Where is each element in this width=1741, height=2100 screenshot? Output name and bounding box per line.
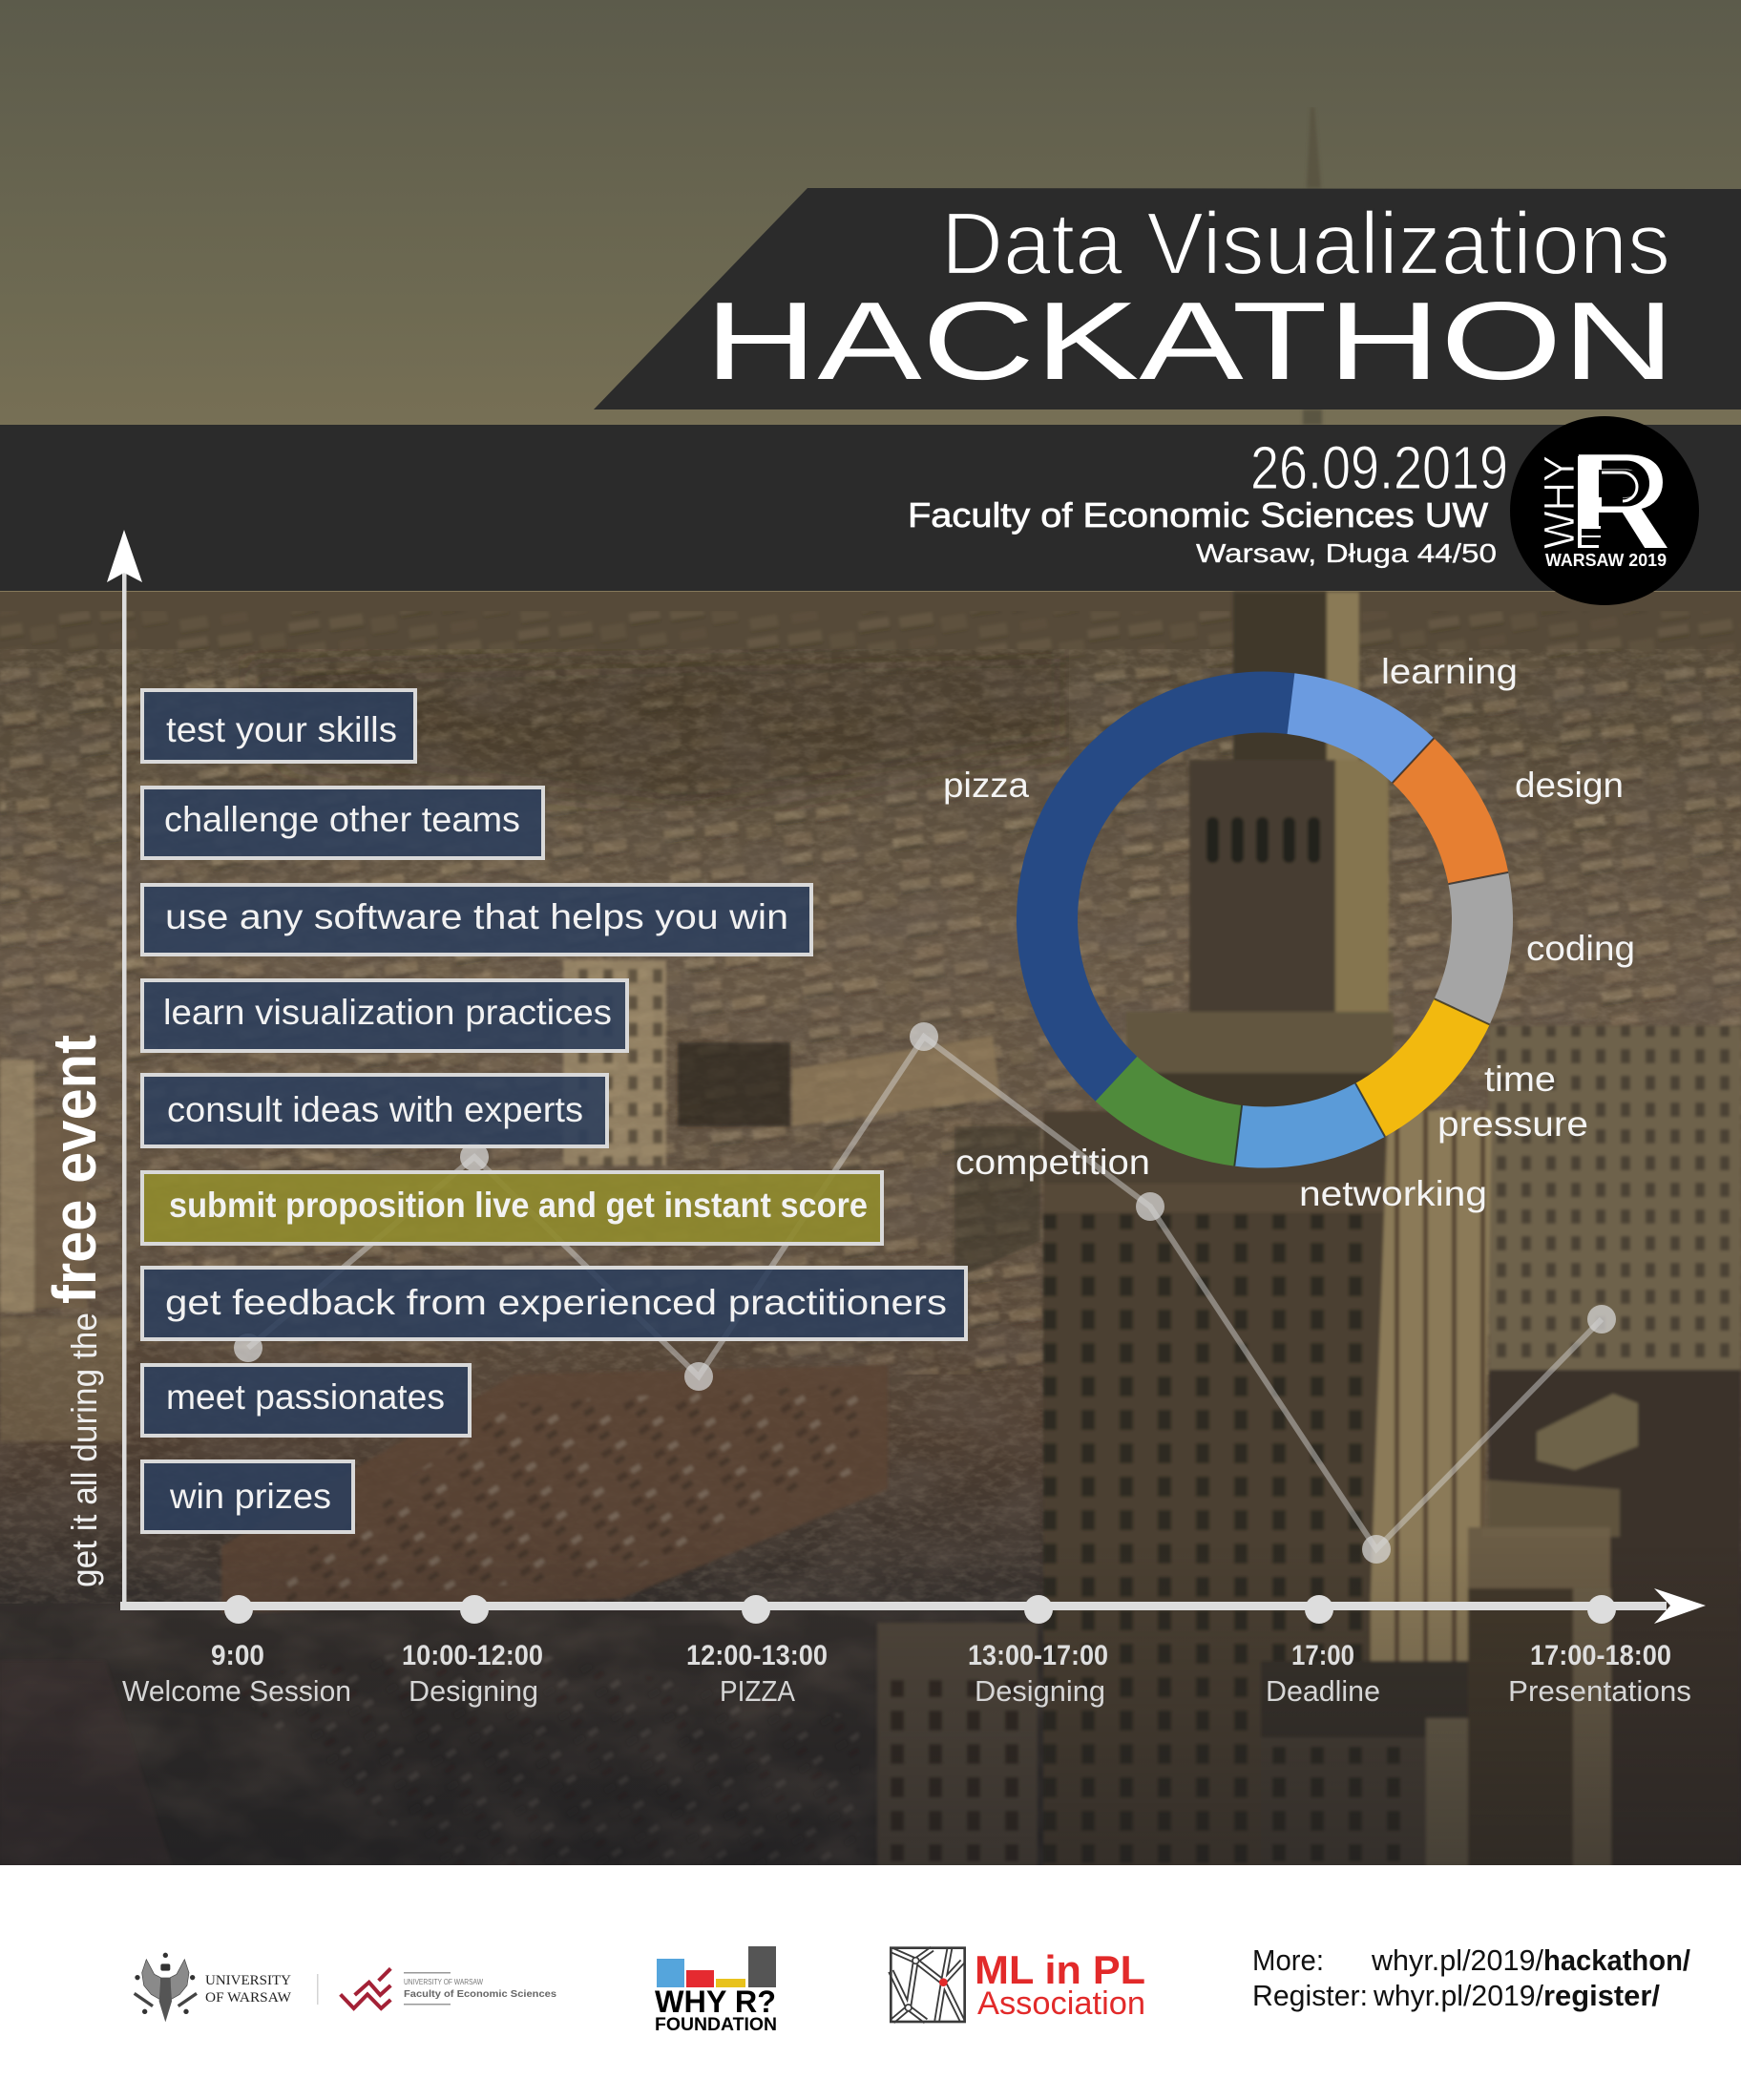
timeline labels: Presentations: [1508, 1674, 1691, 1708]
line chart: energy over the day: [234, 1022, 1616, 1564]
box: meet passionates: [142, 1365, 470, 1436]
title line: Data Visualizations: Data Visualizations: [941, 194, 1670, 293]
donut labels: pressure: [1437, 1104, 1588, 1144]
box: submit proposition (highlighted): [142, 1172, 882, 1244]
vertical caption: get it all during the free event: get it all during the: [65, 1312, 104, 1587]
vertical caption: get it all during the free event: free event: [40, 1035, 109, 1304]
donut labels: coding: [1526, 929, 1635, 968]
box: test your skills: test your skills: [166, 710, 397, 749]
venue: Faculty of Economic Sciences UW: [908, 495, 1488, 535]
box: get feedback: get feedback from experienced practitioners: [165, 1283, 947, 1322]
box: use any software: use any software that helps you win: [165, 897, 788, 936]
x axis timeline with arrow and dots: [120, 1588, 1706, 1624]
box: consult ideas with experts: consult ideas with experts: [167, 1090, 583, 1129]
links: more and register: whyr.pl/2019/: [1373, 1979, 1543, 2012]
donut labels: learning: [1381, 652, 1518, 691]
donut labels: time: [1484, 1060, 1556, 1099]
Faculty of Economic Sciences logo: UNIVERSITY OF WARSAW: [404, 1978, 483, 1986]
Why R? Foundation logo: WHY R?: [655, 1984, 776, 2019]
Why R? Warsaw 2019 logo: WHY: [1535, 455, 1584, 549]
timeline labels: [122, 1640, 1691, 1708]
timeline labels: PIZZA: [720, 1674, 795, 1708]
links: more and register: hackathon/: [1543, 1943, 1690, 1977]
links: more and register: Register:: [1252, 1979, 1368, 2012]
event details band: [0, 425, 1741, 591]
ML in PL Association logo: ML in PL: [975, 1947, 1145, 1992]
Why R? Warsaw 2019 logo: WARSAW 2019: [1545, 551, 1667, 570]
box: learn visualization practices: [142, 980, 627, 1051]
Why R? Foundation logo: FOUNDATION: [655, 2015, 777, 2035]
timeline labels: Designing: [409, 1674, 538, 1708]
Why R? Warsaw 2019 logo: [1510, 416, 1699, 605]
box: win prizes: [142, 1461, 353, 1532]
donut chart: [957, 612, 1572, 1228]
vertical caption: get it all during the free event: [40, 1035, 109, 1587]
links: more and register: More:: [1252, 1943, 1324, 1977]
timeline labels: Deadline: [1266, 1674, 1380, 1708]
box: consult ideas with experts: [142, 1075, 607, 1146]
donut labels: design: [1515, 766, 1624, 805]
timeline labels: 9:00: [211, 1640, 264, 1671]
University of Warsaw logo: [135, 1953, 319, 2022]
box: test your skills: [142, 690, 415, 762]
box: meet passionates: meet passionates: [166, 1377, 445, 1417]
title banner: [594, 188, 1741, 410]
timeline labels: 10:00-12:00: [402, 1640, 543, 1671]
date: 26.09.2019: [1250, 433, 1508, 502]
box: win prizes: win prizes: [169, 1477, 331, 1516]
donut labels: networking: [1299, 1174, 1487, 1213]
address: Warsaw, Długa 44/50: [1196, 538, 1497, 568]
timeline labels: 13:00-17:00: [968, 1640, 1108, 1671]
timeline labels: 17:00-18:00: [1530, 1640, 1671, 1671]
footer white panel: [0, 1865, 1741, 2100]
icon: eagle: [135, 1953, 197, 2022]
donut labels: competition: [955, 1143, 1150, 1182]
University of Warsaw logo: UNIVERSITY: [205, 1973, 291, 1988]
links: more and register: register/: [1543, 1979, 1660, 2012]
donut labels: pizza: [943, 766, 1029, 805]
Faculty of Economic Sciences logo: [341, 1968, 556, 2008]
links: more and register: whyr.pl/2019/: [1371, 1943, 1543, 1977]
y axis with arrow: [107, 530, 142, 1606]
box: submit proposition (highlighted): submit proposition live and get instant score: [169, 1186, 868, 1225]
donut labels: [943, 652, 1635, 1213]
box: learn visualization practices: learn visualization practices: [163, 993, 612, 1032]
benefit boxes list: [142, 690, 966, 1532]
box: challenge other teams: challenge other teams: [164, 800, 520, 839]
timeline labels: 17:00: [1291, 1640, 1354, 1671]
ML in PL Association logo: [891, 1947, 1145, 2022]
Why R? Foundation logo: [655, 1946, 777, 2035]
box: get feedback: [142, 1268, 966, 1339]
ML in PL Association logo: Association: [977, 1985, 1145, 2022]
University of Warsaw logo: OF WARSAW: [205, 1990, 292, 2006]
title line: HACKATHON: HACKATHON: [704, 279, 1675, 403]
box: challenge other teams: [142, 788, 543, 858]
box: use any software: [142, 885, 811, 955]
Faculty of Economic Sciences logo: Faculty of Economic Sciences: [404, 1989, 556, 2000]
Why R? Warsaw 2019 logo: R: [1569, 426, 1670, 578]
links: more and register: [1252, 1943, 1690, 2012]
timeline labels: 12:00-13:00: [686, 1640, 828, 1671]
icon: network mark: [891, 1948, 965, 2022]
timeline labels: Welcome Session: [122, 1674, 351, 1708]
timeline labels: Designing: [975, 1674, 1105, 1708]
